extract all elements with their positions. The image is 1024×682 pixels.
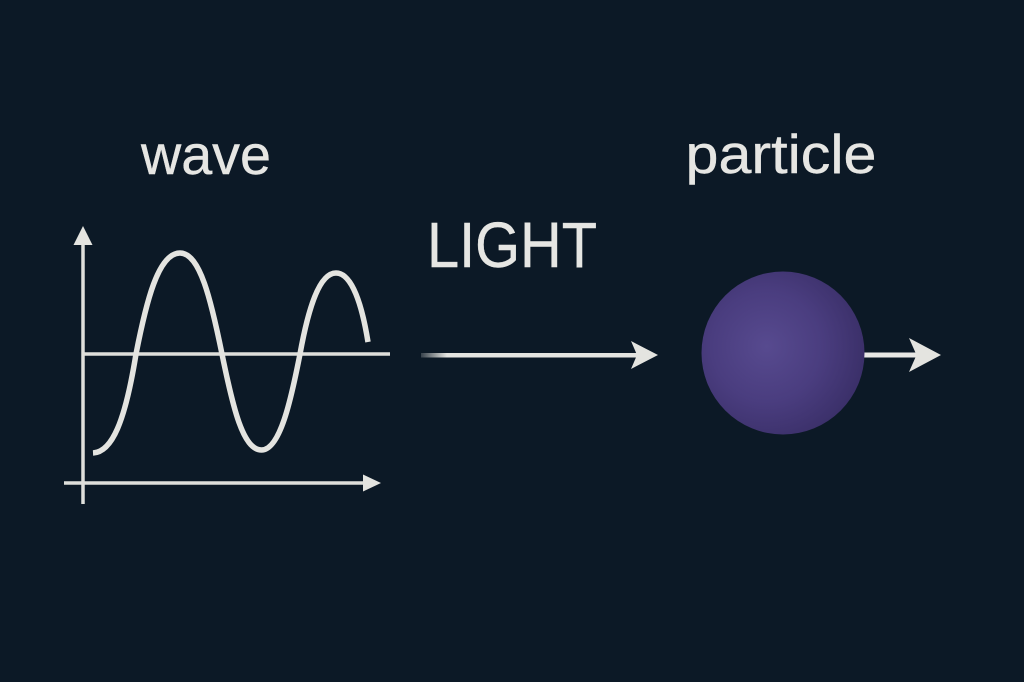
icon: particle sphere	[702, 272, 864, 434]
sine wave curve	[93, 253, 368, 453]
y axis arrow	[74, 226, 92, 504]
arrow: particle motion	[860, 338, 941, 372]
heading: LIGHT: LIGHT	[427, 209, 597, 281]
heading: particle: particle	[686, 123, 876, 185]
x axis arrow	[64, 474, 381, 492]
heading: wave: wave	[140, 123, 271, 186]
chart: wave graph	[64, 226, 390, 504]
centre line	[84, 352, 390, 356]
arrow: light direction	[421, 341, 658, 369]
